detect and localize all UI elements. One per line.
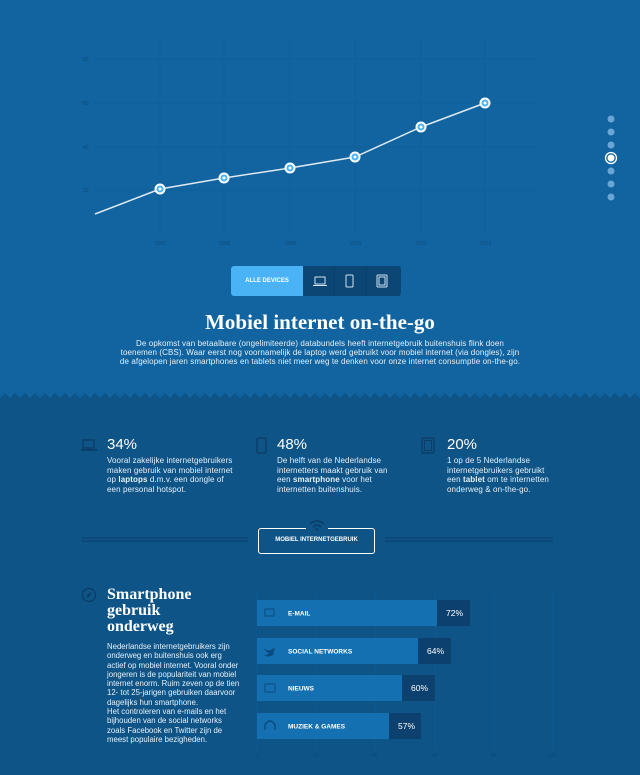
icon: wifi xyxy=(306,520,328,531)
section label: mobiel internetgebruik xyxy=(258,528,375,554)
bar: nieuws: 60% xyxy=(411,683,428,693)
stat: tablet: 20% xyxy=(447,436,477,453)
bar: nieuws: NIEUWS xyxy=(288,686,315,692)
heading: smartphone gebruik onderweg: onderweg xyxy=(107,618,174,635)
stat: laptops: 34% xyxy=(107,436,137,453)
bar chart: usage: 40 xyxy=(372,753,378,759)
stat: smartphone: 48% xyxy=(277,436,307,453)
chart: line chart: 2012 xyxy=(480,241,491,247)
bar: muziek & games: MUZIEK & GAMES xyxy=(288,724,346,730)
button: alle devices: ALLE DEVICES xyxy=(245,278,289,284)
icons: laptop phone tablet xyxy=(313,266,388,296)
heading: smartphone gebruik onderweg: Smartphone xyxy=(107,586,191,603)
stat: tablet xyxy=(421,436,549,494)
bar: e-mail: 72% xyxy=(446,608,463,618)
chart: line chart: 80 xyxy=(83,57,89,63)
bar: e-mail xyxy=(257,600,470,626)
chart: line chart: 2010 xyxy=(350,241,361,247)
icon: compass xyxy=(82,588,96,602)
paragraph: smartphone: Het controleren van e-mails en het bijhouden van de social networks zoals Facebook en Twitter zijn de meest populaire bezigheden. xyxy=(107,707,226,744)
paragraph: smartphone xyxy=(106,642,239,744)
chart: line chart: 40 xyxy=(83,145,89,151)
heading: smartphone gebruik onderweg: gebruik xyxy=(107,602,160,619)
section label: mobiel internetgebruik: MOBIEL INTERNETGEBRUIK xyxy=(275,537,358,543)
bar: social networks: 64% xyxy=(427,646,444,656)
intro paragraph: De opkomst van betaalbare (ongelimiteerde) databundels heeft internetgebruik buitenshuis flink doen toenemen (CBS). Waar eerst nog voornamelijk de laptop werd gebruikt voor mobiel internet (via dongles), zijn de afgelopen jaren smartphones en tablets niet meer weg te denken voor onze internet consumptie on-the-go. xyxy=(120,339,520,366)
icon: phone xyxy=(256,437,267,454)
stat: laptops xyxy=(81,436,233,494)
bar chart: usage: 20 xyxy=(313,753,319,759)
bar chart: usage: 60 xyxy=(432,753,438,759)
stat: smartphone: De helft van de Nederlandse internetters maakt gebruik van een smartphone voor het internetten buitenshuis. xyxy=(277,456,388,494)
chart: line chart xyxy=(83,57,491,247)
chart: line chart: 2007 xyxy=(155,241,166,247)
bar: e-mail: E-MAIL xyxy=(288,610,310,618)
stat: laptops: Vooral zakelijke internetgebruikers maken gebruik van mobiel internet op laptops d.m.v. een dongle of een personal hotspot. xyxy=(107,456,233,494)
stat: smartphone xyxy=(256,436,388,494)
bar: nieuws xyxy=(257,675,435,701)
chart: line chart: 60 xyxy=(83,101,89,107)
bar chart: usage: 100 xyxy=(548,753,557,759)
chart: line chart: 2009 xyxy=(285,241,296,247)
heading: smartphone gebruik onderweg xyxy=(107,586,192,635)
bar: social networks xyxy=(257,638,451,664)
bar: muziek & games xyxy=(257,713,421,739)
title: Mobiel internet on-the-go xyxy=(205,310,435,334)
bar: muziek & games: 57% xyxy=(398,721,415,731)
chart: line chart: 20 xyxy=(83,188,89,194)
device toggle xyxy=(231,266,401,296)
chart: line chart: 2011 xyxy=(416,241,427,247)
chart: line chart: 2008 xyxy=(219,241,230,247)
side navigation dots xyxy=(604,116,618,200)
paragraph: smartphone: Nederlandse internetgebruikers zijn onderweg en buitenshuis ook erg actief op mobiel internet. Vooral onder jongeren is de populariteit van mobiel internet enorm. Ruim zeven op de tien 12- tot 25-jarigen gebruiken daarvoor dagelijks hun smartphone. xyxy=(107,642,239,707)
icon: tablet xyxy=(421,437,435,454)
section divider lines xyxy=(82,538,553,542)
bar: social networks: SOCIAL NETWORKS xyxy=(288,648,353,656)
bar chart: usage: 0 xyxy=(256,753,259,759)
bar chart: usage: 80 xyxy=(491,753,497,759)
bar chart: usage xyxy=(256,590,557,759)
button: alle devices xyxy=(231,266,303,296)
stat: tablet: 1 op de 5 Nederlandse internetgebruikers gebruikt een tablet om te internetten onderweg & on-the-go. xyxy=(447,456,549,494)
icon: laptop xyxy=(81,439,97,451)
